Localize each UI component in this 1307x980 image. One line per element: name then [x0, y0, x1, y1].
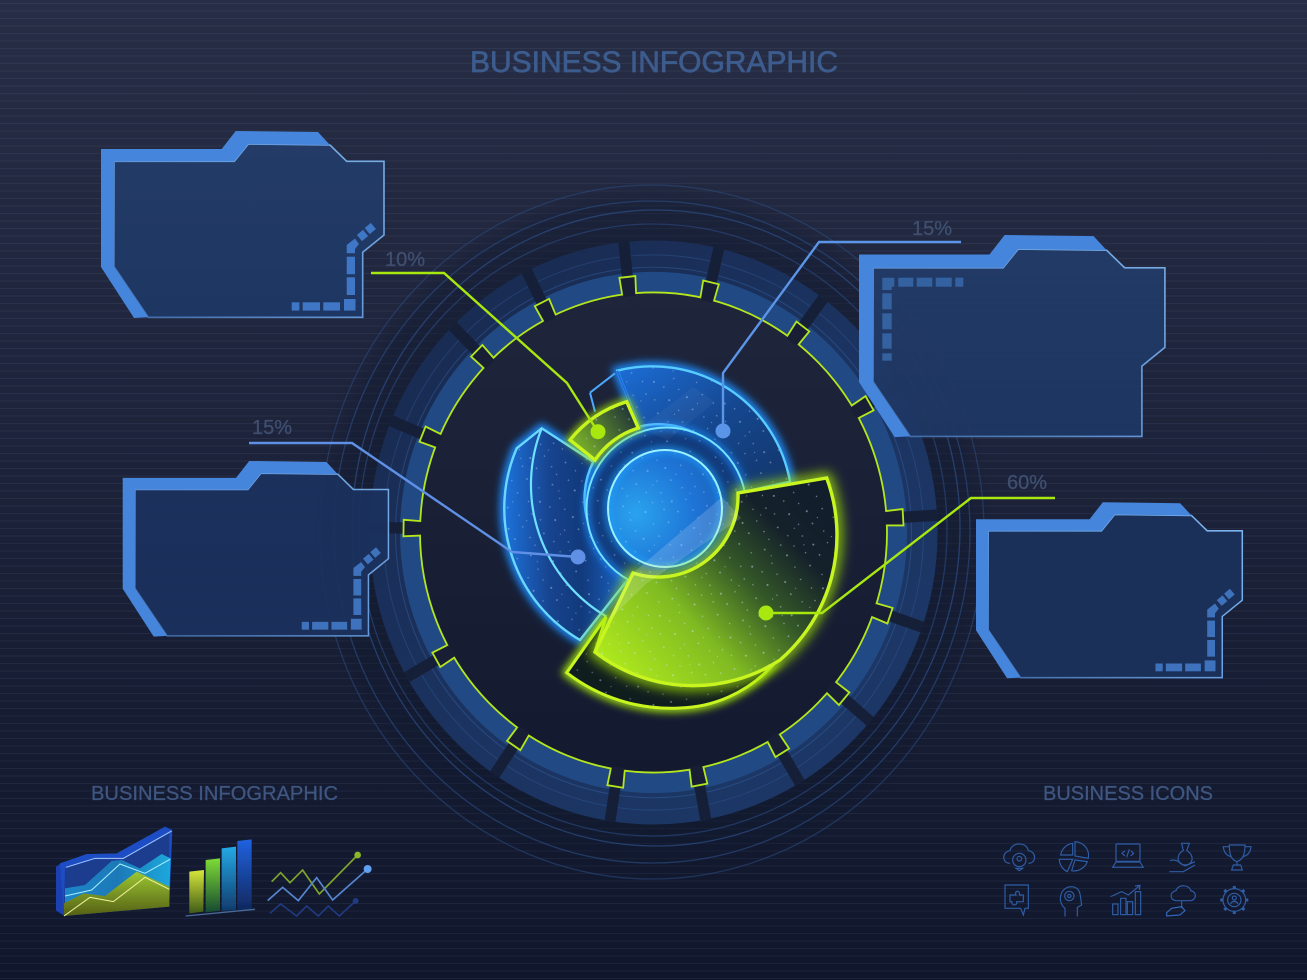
- icon: head with gear: [1060, 887, 1082, 917]
- icon: cloud and shoe: [1167, 886, 1195, 916]
- leader: 60%: [758, 498, 1055, 620]
- heading: business icons: BUSINESS ICONS: [1043, 783, 1213, 805]
- label: 60%: 60%: [1007, 472, 1047, 494]
- inner ring: [586, 428, 746, 590]
- panel: top left: [101, 131, 384, 318]
- label: 10%: 10%: [385, 249, 425, 271]
- heading: business infographic: BUSINESS INFOGRAPHIC: [91, 783, 338, 805]
- icon: trophy: [1223, 845, 1251, 870]
- icon: gear user: [1220, 886, 1248, 914]
- panel: middle right: [976, 502, 1242, 678]
- panel: middle left: [123, 461, 388, 637]
- line chart: [268, 852, 372, 916]
- icon: hand with money bag: [1169, 843, 1195, 872]
- lime segment: 10%: [570, 402, 638, 460]
- label: left 15%: 15%: [252, 417, 292, 439]
- blue segment: left 15%: [504, 428, 633, 640]
- lime segment: lower shadow layer: [567, 617, 770, 708]
- panel: top right: [859, 235, 1165, 437]
- concentric rings backdrop: [313, 180, 993, 884]
- label: top right 15%: 15%: [912, 218, 952, 240]
- icon: growth bars: [1111, 885, 1141, 915]
- segmented blue band: [369, 241, 937, 822]
- title: BUSINESS INFOGRAPHIC: [470, 46, 838, 79]
- icon: laptop code: [1113, 844, 1143, 867]
- glass sheen: [606, 387, 741, 623]
- doughnut chart: [504, 366, 837, 708]
- ring tabs: [369, 241, 937, 822]
- icon: puzzle: [1005, 885, 1028, 915]
- blue segment: top right 15%: [590, 366, 790, 493]
- 3d bar chart: [186, 839, 255, 916]
- core circle: [608, 450, 722, 567]
- leader: 10%: [371, 273, 606, 439]
- leader: left 15%: [249, 443, 586, 564]
- icon: pie chart: [1059, 842, 1089, 872]
- icon: cloud user: [1004, 844, 1035, 871]
- 3d area chart: [56, 827, 172, 916]
- leader: top right 15%: [716, 242, 961, 438]
- icon set: [1004, 842, 1251, 917]
- lime segment: 60%: [595, 478, 837, 686]
